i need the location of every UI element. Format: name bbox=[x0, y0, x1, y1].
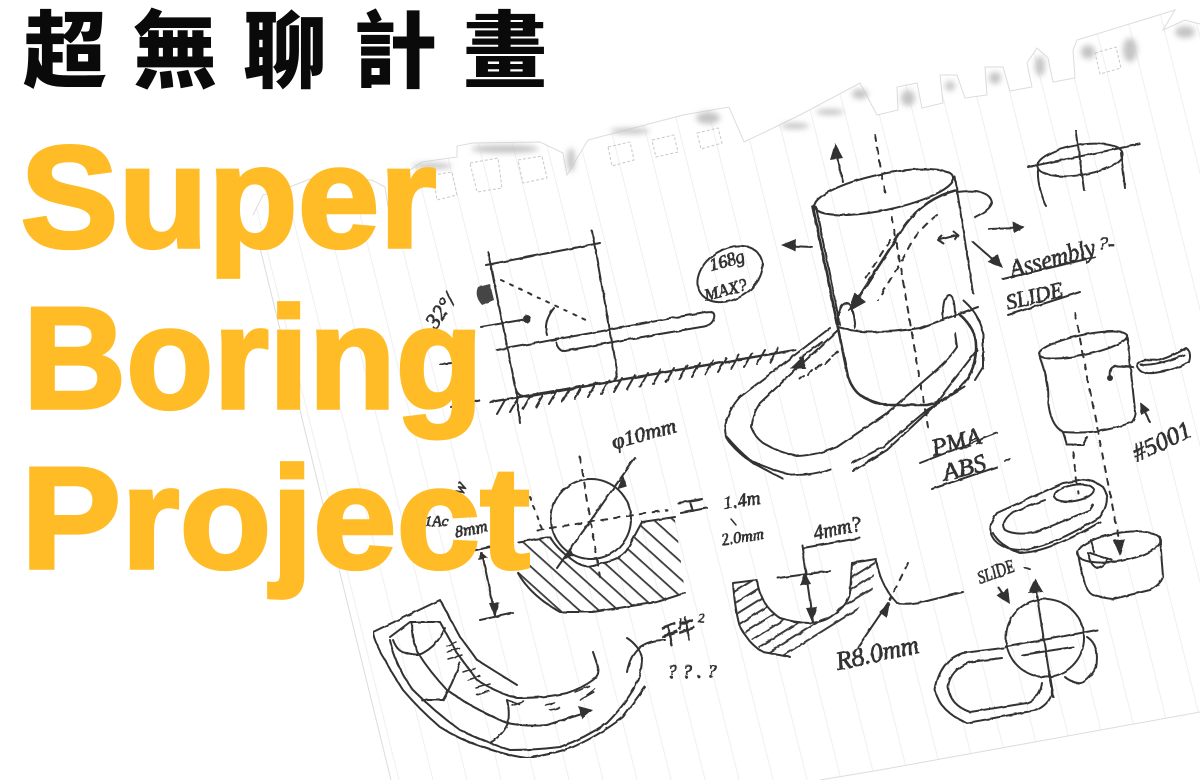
title line: Super: Super bbox=[20, 116, 437, 278]
arrow: right bbox=[989, 222, 1025, 233]
punched squares bbox=[433, 47, 1121, 200]
note: weight limit: MAX? bbox=[701, 275, 749, 305]
rail loop bbox=[725, 328, 977, 479]
torn edge shadows bbox=[412, 26, 1195, 172]
sketch: curved horn channel bbox=[373, 600, 717, 758]
sketch: small cup with handle bbox=[1037, 313, 1196, 556]
sketch: small cup with handle: #5001 bbox=[1128, 417, 1196, 467]
sketch: slide assembly, circle with oval: SLIDE bbox=[975, 556, 1018, 589]
sketch: bowl bbox=[1075, 526, 1163, 599]
sketch: slide assembly, circle with oval bbox=[935, 556, 1097, 723]
sketch: beaker with spoon bbox=[419, 231, 795, 423]
sketch: sphere in hatched seat: 1Ac bbox=[425, 514, 449, 530]
sketch: sphere in hatched seat: 1.4m bbox=[722, 488, 762, 514]
panel: torn notebook paper bbox=[253, 10, 1200, 780]
note: material: PMA bbox=[928, 424, 984, 462]
sketch: U section with radius: R8.0mm bbox=[832, 630, 921, 676]
paper sheet with ruled lines bbox=[253, 10, 1200, 780]
sketch: curved horn channel: 2 bbox=[698, 610, 705, 625]
sketch: curved horn channel: ??.? bbox=[667, 661, 717, 683]
sketch: sphere in hatched seat: φ10mm bbox=[609, 414, 679, 454]
title line: Project: Project bbox=[21, 437, 530, 599]
sketch: curved horn channel: 干牛 bbox=[656, 614, 700, 653]
sketch: sphere in hatched seat: 1/w bbox=[443, 478, 472, 512]
note: assembly / slide bbox=[1003, 233, 1115, 315]
torn edge outline bbox=[253, 10, 1200, 780]
sketch: main cup on rail bbox=[725, 135, 1025, 479]
sketch: sphere in hatched seat: 8mm bbox=[453, 516, 489, 542]
sketch: top right cup ring bbox=[1028, 130, 1140, 206]
note: assembly / slide: ?- bbox=[1098, 233, 1115, 255]
title: Chinese: 超無聊計畫 bbox=[23, 5, 573, 99]
note: material: ABS bbox=[938, 450, 989, 487]
arrow: up bbox=[830, 143, 843, 182]
sketch: sphere in hatched seat bbox=[425, 414, 765, 620]
note: weight limit: 168g bbox=[707, 246, 747, 275]
arrow: to assembly note bbox=[973, 242, 1003, 268]
sketch: U section with radius bbox=[733, 511, 963, 676]
note: assembly / slide: SLIDE bbox=[1003, 276, 1066, 315]
title line: Boring: Boring bbox=[23, 277, 483, 439]
sketch drawings bbox=[373, 130, 1196, 758]
arrow: left bbox=[781, 239, 812, 251]
sketch: oval tray bbox=[990, 480, 1107, 553]
title: English bbox=[20, 116, 530, 599]
sketch: U section with radius: 4mm? bbox=[811, 511, 863, 545]
note: assembly / slide: Assembly bbox=[1004, 233, 1099, 284]
sketch: sphere in hatched seat: 2.0mm bbox=[720, 526, 765, 549]
handwriting: angle: 32°/ bbox=[419, 287, 462, 334]
note: weight limit bbox=[687, 234, 773, 314]
note: material bbox=[920, 424, 1010, 489]
